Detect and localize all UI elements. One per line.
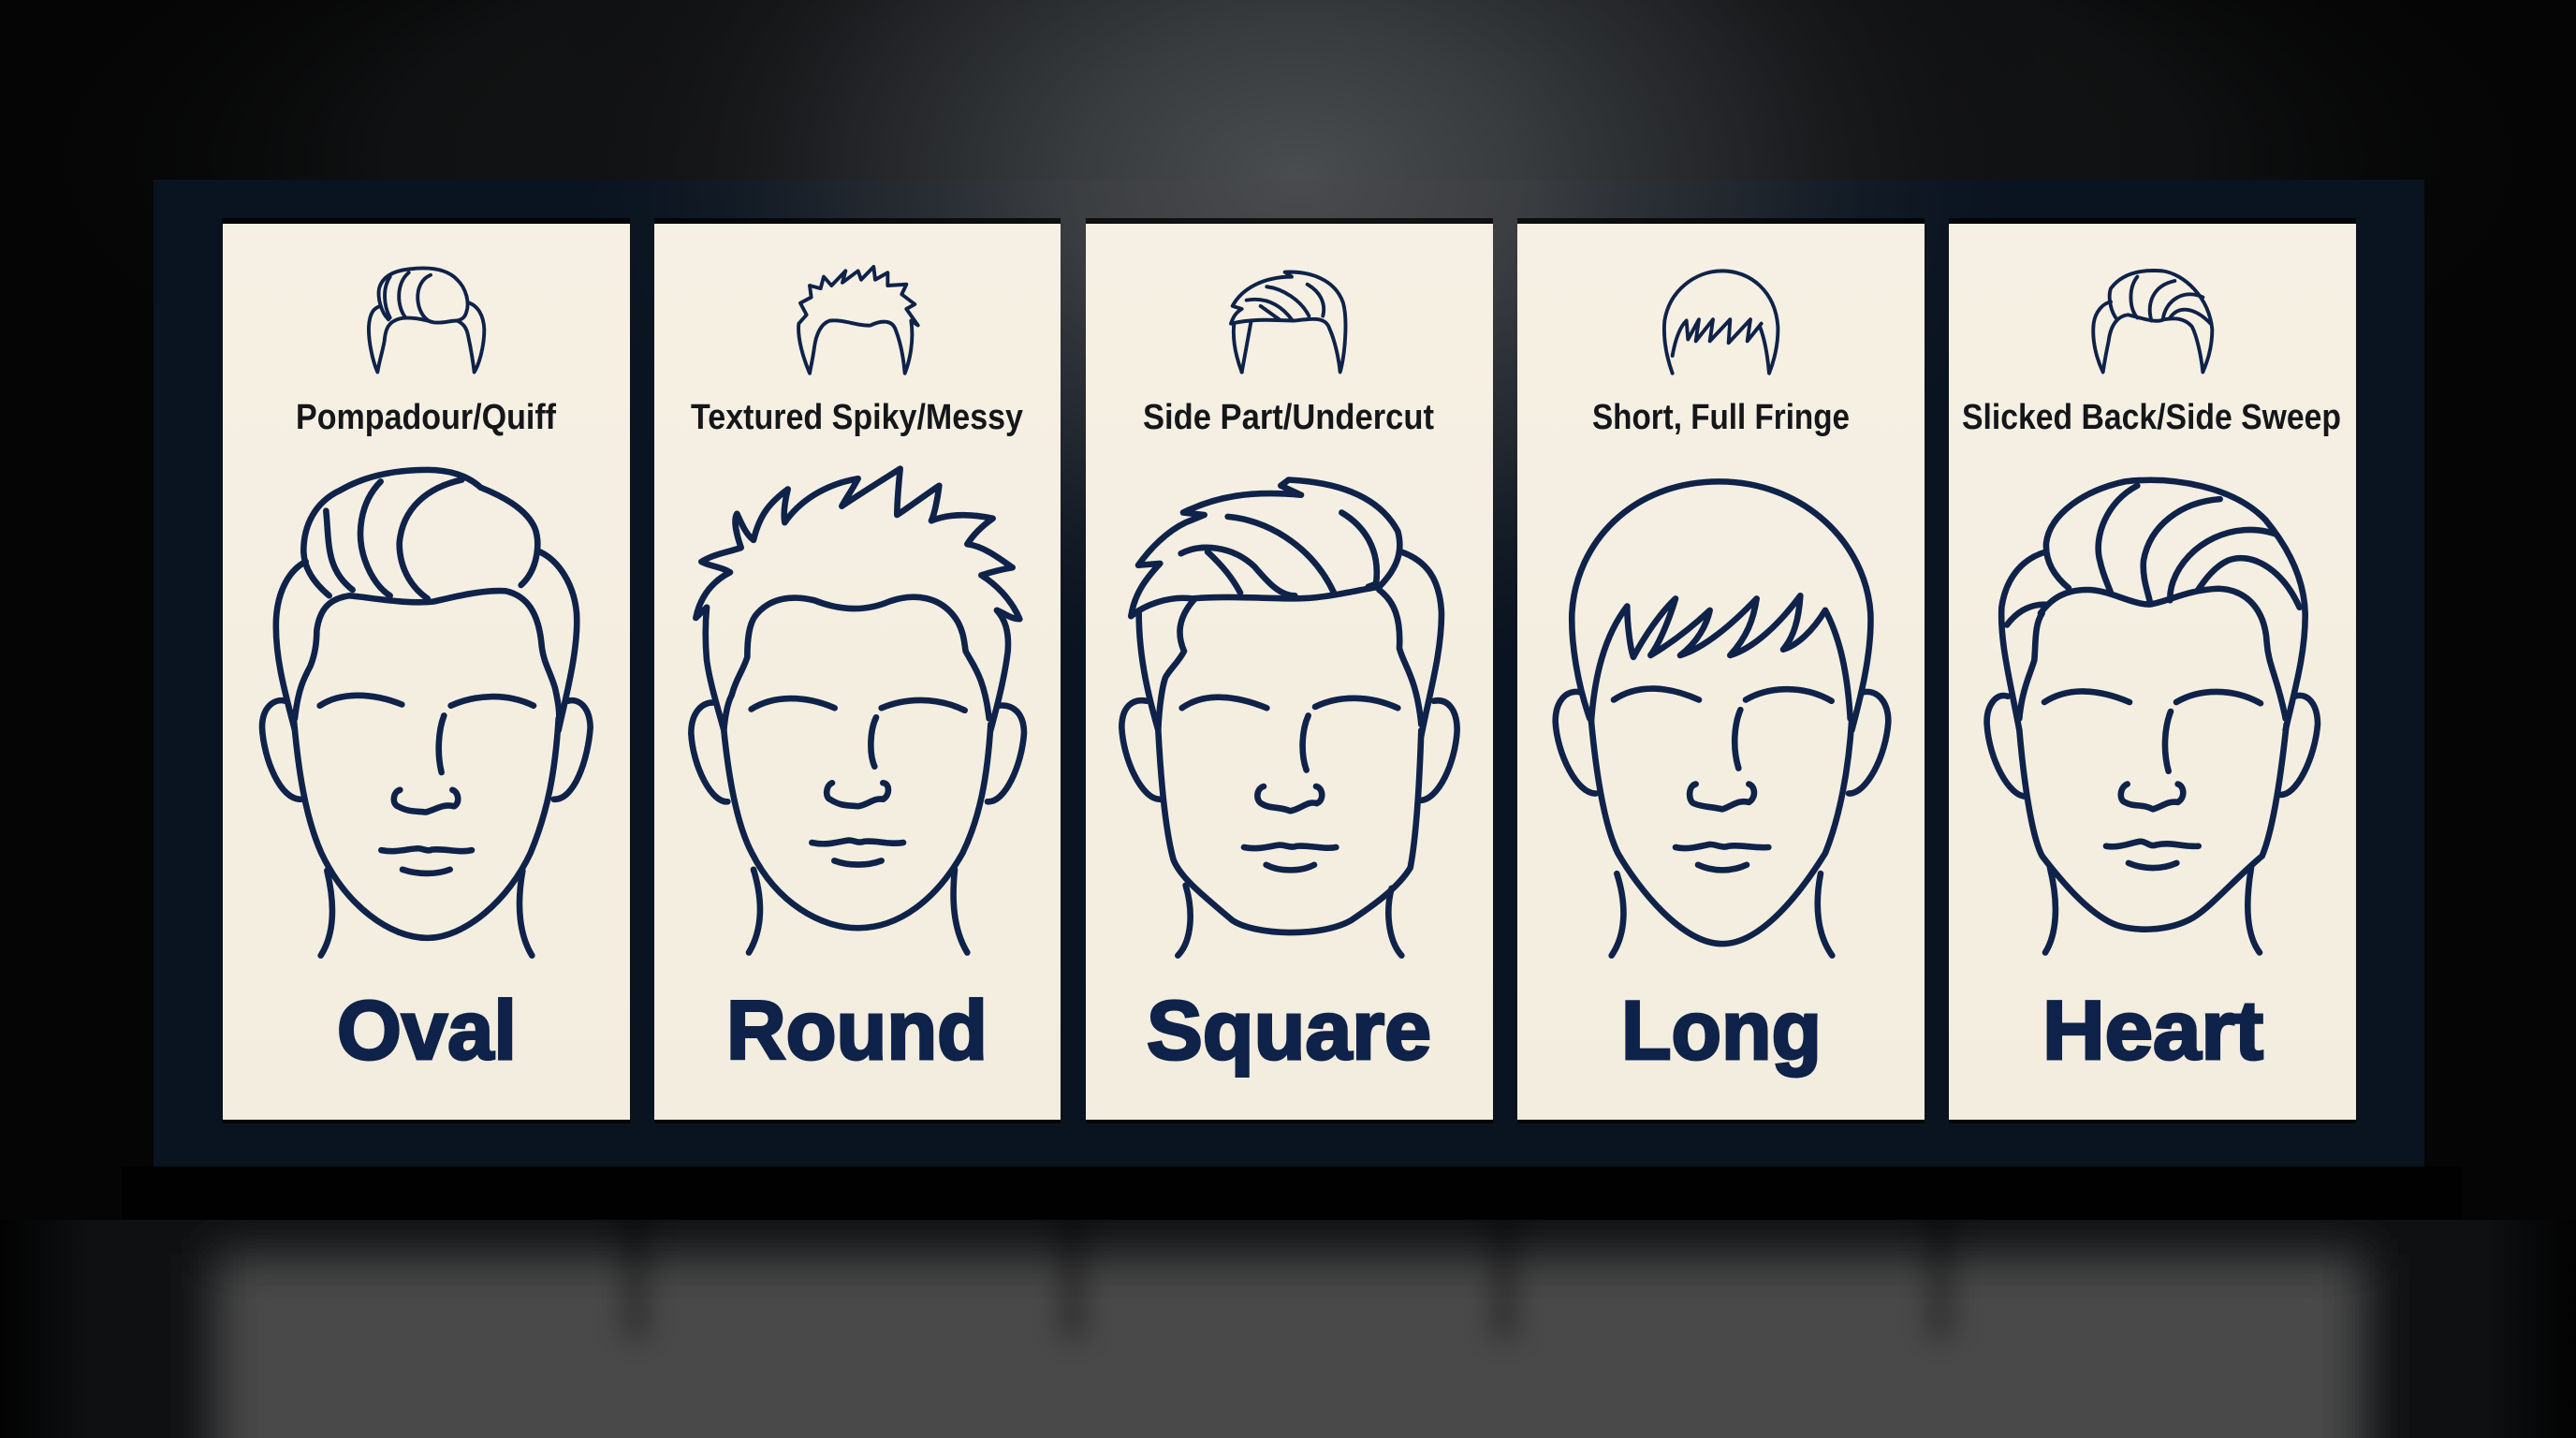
illustration: oval face with pompadour [262,470,591,956]
style label: Side Part/Undercut: Side Part/Undercut [1143,398,1434,437]
panel: navy backing board [154,180,2424,1167]
panel: square face card [1086,224,1493,1120]
face shape name: Round: Round [726,983,988,1077]
icon: short full fringe hair [1664,271,1778,374]
panel: oval face card [223,224,630,1120]
face shape name: Square: Square [1147,983,1431,1077]
face shape name: Heart: Heart [2042,983,2263,1077]
illustration: long face with full fringe [1556,481,1888,956]
illustration: square face with side part [1121,479,1457,956]
style label: Pompadour/Quiff: Pompadour/Quiff [296,398,556,437]
illustration: round face with spiky hair [691,469,1024,953]
background: reflective floor with light reflections [0,1167,2576,1438]
style label: Textured Spiky/Messy: Textured Spiky/Messy [691,398,1023,437]
icon: slicked back side sweep hair [2093,271,2212,373]
panel: round face card [654,224,1061,1120]
face shape name: Oval: Oval [337,983,517,1077]
illustration: heart face with slicked back hair [1987,480,2318,953]
icon: pompadour quiff hair [369,268,484,373]
style label: Slicked Back/Side Sweep: Slicked Back/Side Sweep [1962,398,2341,437]
icon: side part undercut hair [1231,272,1345,373]
panel: heart face card [1949,224,2356,1120]
style label: Short, Full Fringe: Short, Full Fringe [1592,398,1850,437]
face shape name: Long: Long [1621,983,1822,1077]
icon: textured spiky hair [798,267,918,374]
panel: long face card [1517,224,1925,1120]
